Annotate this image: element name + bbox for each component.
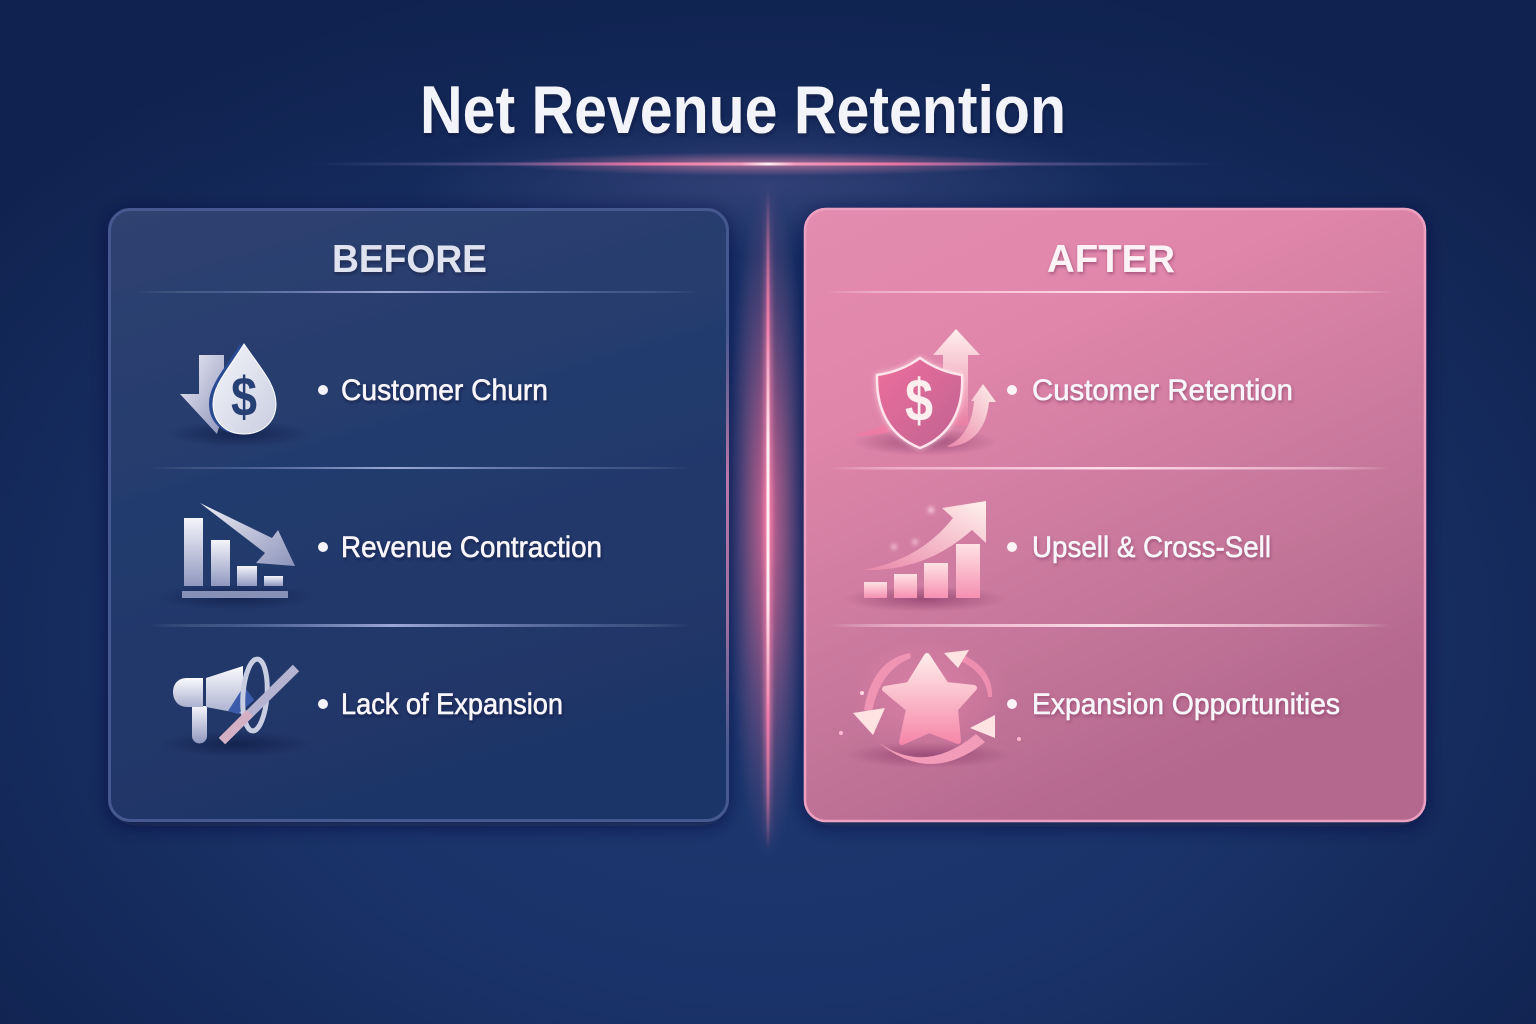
bullet [1007, 542, 1017, 552]
bullet [318, 699, 328, 709]
panel: before [110, 210, 729, 820]
icon: declining bars [156, 503, 316, 610]
heading: after: AFTER [1047, 238, 1175, 281]
bullet [1007, 699, 1017, 709]
label: lack of expansion: Lack of Expansion [341, 688, 563, 721]
icon: falling dollar drop [166, 344, 310, 447]
bullet [1007, 385, 1017, 395]
heading: before: BEFORE [332, 238, 487, 281]
label: customer retention: Customer Retention [1032, 374, 1293, 407]
label: customer churn: Customer Churn [341, 374, 548, 407]
icon: falling dollar drop: $ [231, 365, 257, 428]
icon: shield with rising arrows [853, 329, 997, 456]
title underline glow [310, 152, 1226, 176]
bullet [318, 385, 328, 395]
title: Net Revenue Retention [420, 72, 1066, 148]
label: upsell and cross-sell: Upsell & Cross-Sell [1032, 531, 1271, 564]
bullet [318, 542, 328, 552]
center divider glow line [726, 180, 810, 860]
label: revenue contraction: Revenue Contraction [341, 531, 602, 564]
label: expansion opportunities: Expansion Opportunities [1032, 688, 1340, 721]
icon: growth bars with arrow [843, 501, 1007, 612]
icon: star with circular arrows [839, 637, 1021, 768]
icon: muted megaphone [160, 658, 312, 757]
icon: shield with rising arrows: $ [905, 367, 933, 434]
panel: after [805, 209, 1425, 821]
